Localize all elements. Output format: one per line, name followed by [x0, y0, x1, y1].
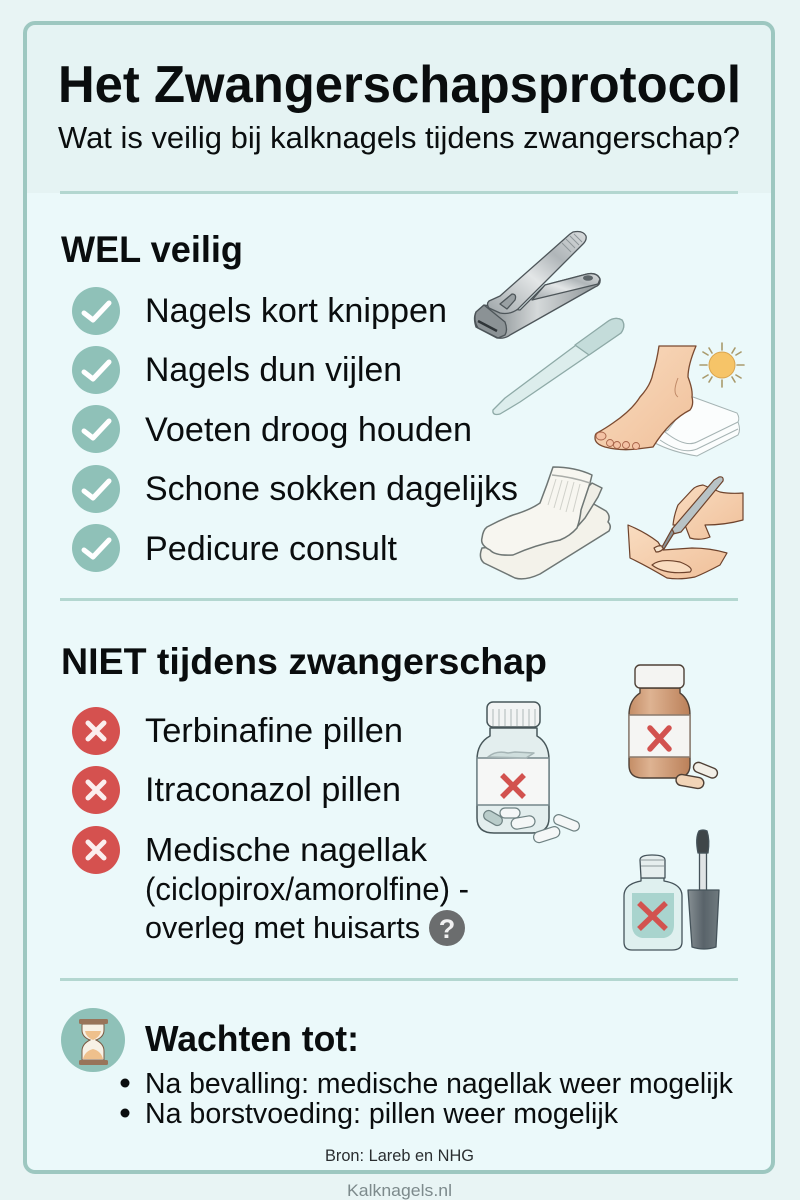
heading: Wachten tot: Wachten tot: [145, 1018, 359, 1059]
icon: cross 1 [72, 707, 120, 755]
icon: white socks [480, 467, 610, 579]
item: nagels vijlen: Nagels dun vijlen [145, 351, 402, 389]
footer: site name: Kalknagels.nl [347, 1181, 452, 1200]
icon: sun [700, 343, 744, 387]
icon: pedicure hands [628, 477, 743, 579]
list: unsafe items [72, 707, 469, 946]
heading: NIET tijdens zwangerschap: NIET tijdens zwangerschap [61, 641, 547, 682]
item: itraconazol: Itraconazol pillen [145, 771, 401, 809]
list: waiting items: Na bevalling: medische nagellak weer mogelijk [145, 1068, 733, 1100]
icon: nail file [493, 318, 624, 414]
icon: check 1 [72, 287, 120, 335]
list: waiting items [120, 1068, 733, 1130]
list: waiting items: Na borstvoeding: pillen weer mogelijk [145, 1098, 618, 1130]
item: medische nagellak: overleg met huisarts [145, 910, 420, 945]
icon: question mark: ? [439, 914, 455, 944]
item: medische nagellak [145, 831, 469, 945]
item: terbinafine: Terbinafine pillen [145, 712, 403, 750]
title: Het Zwangerschapsprotocol [58, 56, 741, 114]
icon: check 4 [72, 465, 120, 513]
icon: check 3 [72, 405, 120, 453]
icon: white pill bottle [477, 702, 581, 844]
subtitle: Wat is veilig bij kalknagels tijdens zwangerschap? [58, 121, 740, 155]
heading: WEL veilig: WEL veilig [61, 229, 243, 270]
item: nagels knippen: Nagels kort knippen [145, 292, 447, 330]
icon: cross 2 [72, 766, 120, 814]
item: voeten droog: Voeten droog houden [145, 411, 472, 449]
icon: brown pill bottle [629, 665, 719, 789]
item: pedicure consult: Pedicure consult [145, 530, 397, 568]
icon: cross 3 [72, 826, 120, 874]
item: medische nagellak: Medische nagellak [145, 831, 428, 868]
icon: nail polish [624, 830, 719, 950]
icon: question mark [429, 910, 465, 946]
icon: check 2 [72, 346, 120, 394]
item: medische nagellak: (ciclopirox/amorolfine) - [145, 871, 469, 907]
source note: Bron: Lareb en NHG [325, 1146, 474, 1165]
item: schone sokken: Schone sokken dagelijks [145, 470, 518, 508]
icon: nail clipper [474, 232, 600, 338]
icon: hourglass [61, 1008, 125, 1072]
icon: check 5 [72, 524, 120, 572]
icon: foot on towel [595, 343, 744, 456]
list: safe items [72, 287, 518, 572]
